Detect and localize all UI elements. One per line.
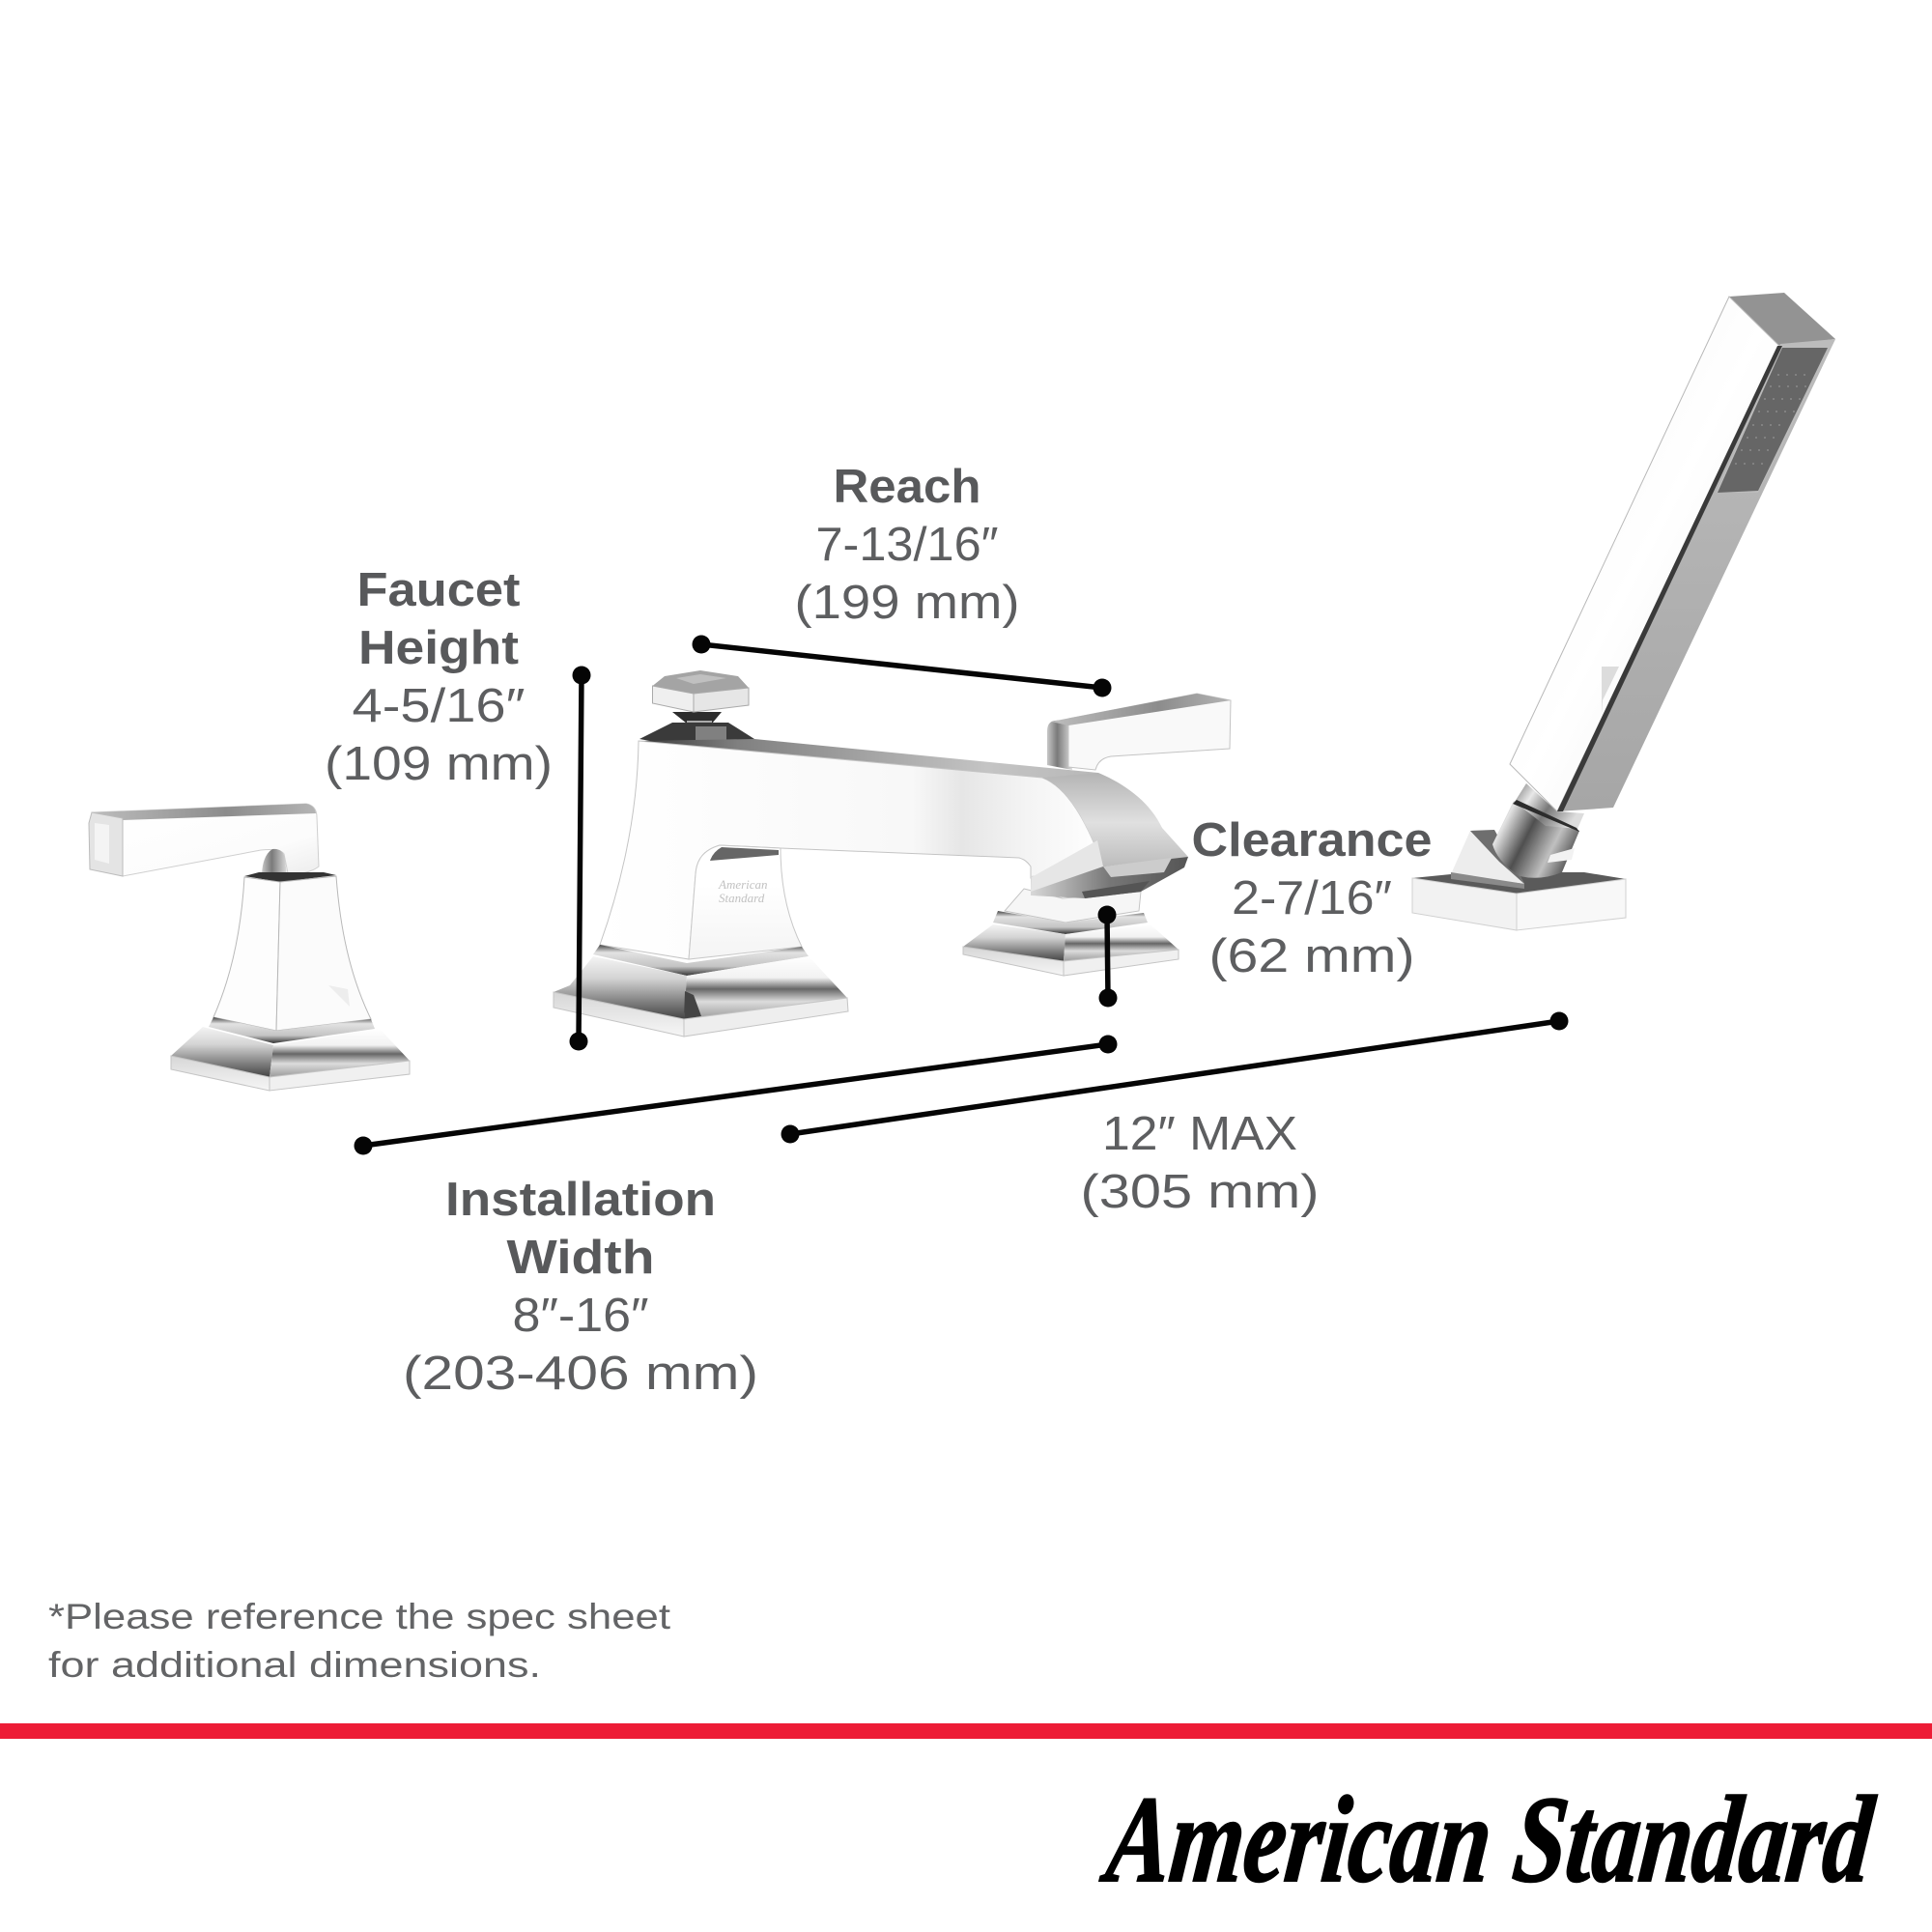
cast logo on body: [718, 877, 768, 905]
lever arm: [89, 804, 319, 876]
top knob: [653, 670, 749, 724]
label: reach: [794, 461, 1020, 629]
left lever handle: [89, 804, 410, 1091]
footnote: for additional dimensions.: [48, 1645, 541, 1685]
label: 12 inch max: (305 mm): [1080, 1166, 1320, 1218]
dimension line: installation width: [354, 1036, 1117, 1155]
label: faucet height: Faucet: [357, 564, 520, 616]
label: installation width: Installation: [445, 1174, 716, 1226]
handle base: [171, 1027, 410, 1091]
label: 12 inch max: 12″ MAX: [1102, 1108, 1297, 1160]
hand shower: [1412, 293, 1835, 930]
body inner leg: [689, 845, 802, 959]
label: 12 inch max: [1080, 1108, 1320, 1218]
label: reach: 7-13/16″: [815, 519, 999, 571]
label: faucet height: 4-5/16″: [352, 680, 526, 732]
label: faucet height: [325, 564, 553, 790]
label: faucet height: (109 mm): [325, 738, 553, 790]
label: installation width: (203-406 mm): [403, 1348, 758, 1400]
footnote: *Please reference the spec sheet: [48, 1597, 671, 1636]
swivel joint: [1492, 783, 1584, 878]
red divider bar: [0, 1723, 1932, 1739]
handle stem: [209, 872, 375, 1043]
label: faucet height: Height: [358, 622, 519, 674]
body bands: [593, 945, 809, 976]
label: installation width: Width: [506, 1232, 655, 1284]
spray panel: [1716, 339, 1835, 493]
label: installation width: [403, 1174, 758, 1400]
shower deck base: [1412, 830, 1626, 930]
label: clearance: [1192, 814, 1432, 982]
spout outlet: [1031, 840, 1188, 898]
arch reflection: [710, 847, 779, 861]
spout body front: [600, 741, 1103, 959]
label: reach: Reach: [833, 461, 981, 513]
label: clearance: 2-7/16″: [1232, 872, 1392, 924]
main faucet spout: [554, 670, 1188, 1037]
rear right lever handle and base: [963, 694, 1231, 976]
dimension line: clearance: [1097, 906, 1117, 1007]
main base: [554, 956, 848, 1037]
rear handle base: [963, 889, 1179, 976]
label: clearance: Clearance: [1192, 814, 1432, 867]
cast logo on body: Standard: [719, 891, 765, 905]
collar: [639, 723, 754, 749]
label: reach: (199 mm): [794, 577, 1020, 629]
dimension line: faucet height: [570, 667, 591, 1051]
label: clearance: (62 mm): [1209, 930, 1414, 982]
footnote: [48, 1597, 671, 1685]
rear lever arm: [1047, 694, 1231, 770]
shower head: [1510, 293, 1835, 811]
cast logo on body: American: [718, 877, 768, 892]
label: installation width: 8″-16″: [512, 1290, 649, 1342]
dimension line: 12 inch max: [781, 1012, 1569, 1144]
spout top surface: [639, 739, 1136, 799]
dimension line: reach: [692, 636, 1111, 697]
spout curve side: [1042, 773, 1188, 872]
